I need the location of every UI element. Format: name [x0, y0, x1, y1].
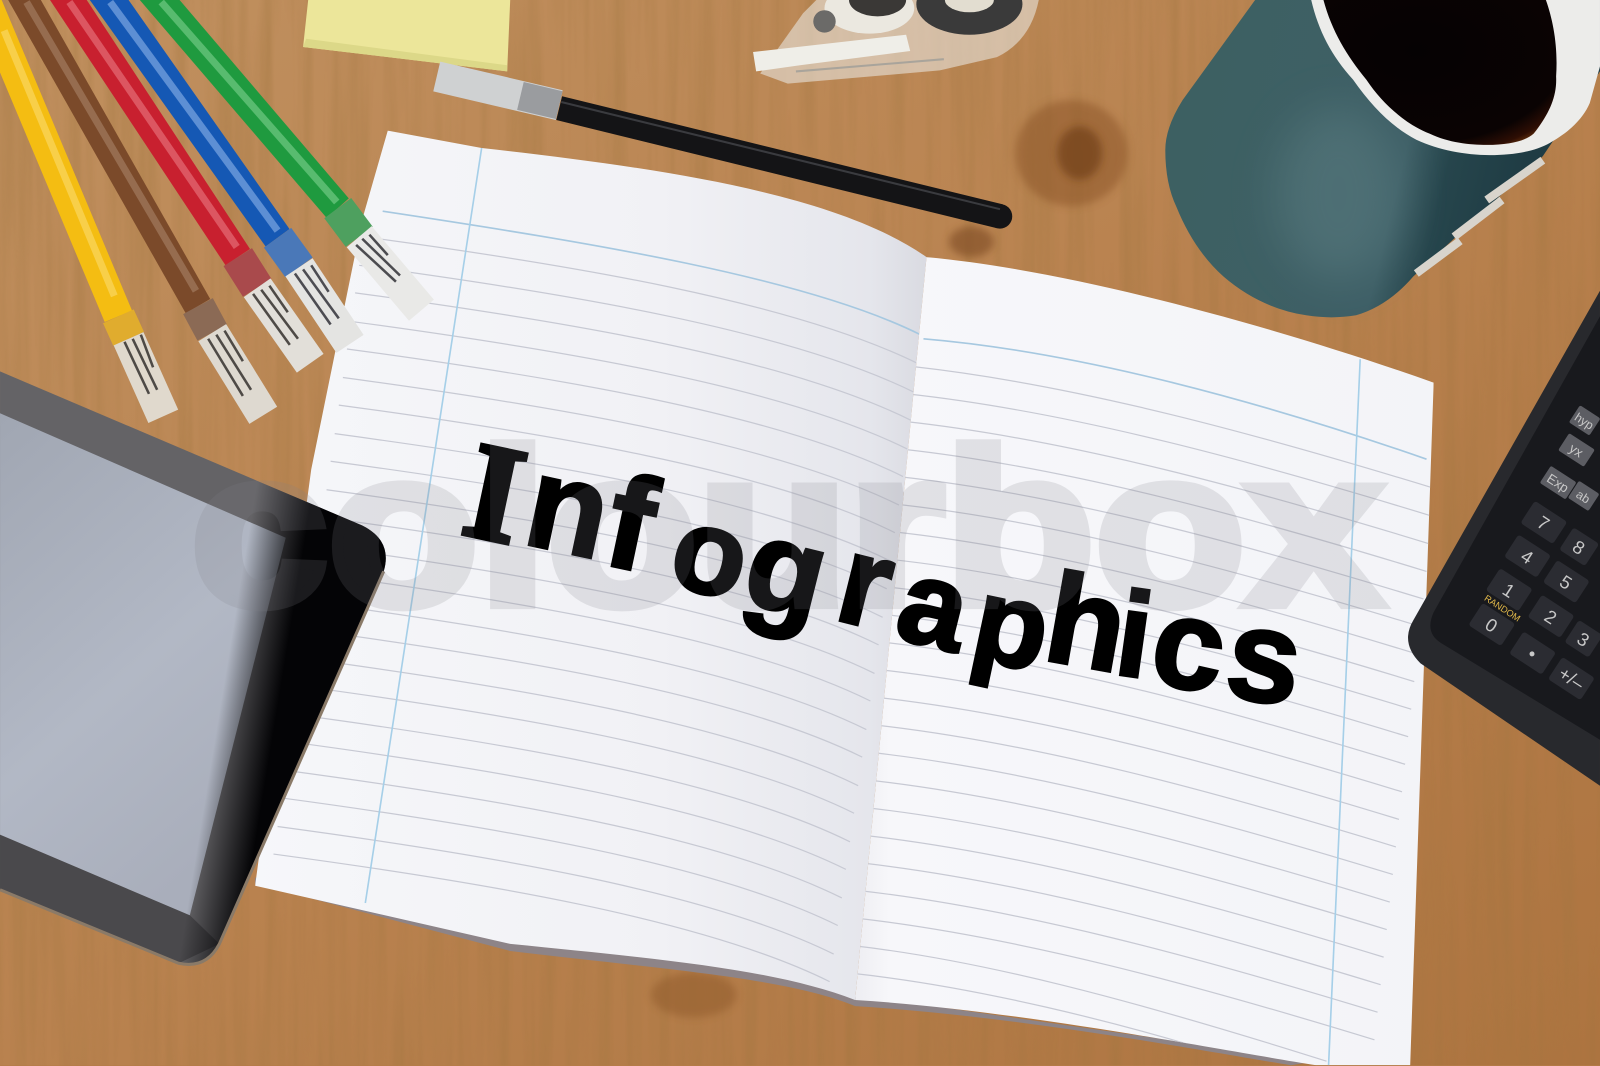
calculator keys: 7	[1534, 511, 1554, 535]
handwritten title: n	[515, 427, 623, 587]
green marker	[140, 0, 421, 310]
calculator keys: 2	[1541, 605, 1561, 628]
tablet bottom bezel	[0, 835, 219, 963]
tablet	[0, 367, 393, 969]
coloured markers	[0, 0, 421, 416]
sticky note	[303, 0, 510, 71]
red marker	[50, 0, 310, 363]
tablet screen	[0, 413, 286, 915]
handwritten title: g	[732, 491, 842, 648]
handwritten title: c	[1142, 569, 1237, 722]
calculator keys: 0	[1481, 613, 1501, 637]
mug lettering	[1416, 160, 1543, 273]
coffee mug	[1165, 0, 1600, 317]
calculator keys: RANDOM	[1483, 593, 1522, 624]
handwritten title: f	[594, 447, 669, 601]
mug highlight	[1276, 107, 1402, 281]
open notebook	[245, 122, 1449, 1065]
handwritten title: r	[825, 508, 907, 658]
handwritten title: a	[886, 531, 984, 678]
calculator keys: +/–	[1555, 662, 1589, 695]
right page	[843, 250, 1449, 1065]
calculator keys: 4	[1517, 545, 1537, 568]
calculator keys: Exp	[1544, 471, 1571, 496]
notebook page stack edge	[255, 878, 1316, 1065]
tablet metallic edge	[0, 571, 384, 964]
calculator keys: 3	[1573, 628, 1593, 651]
calculator keys: hyp	[1572, 410, 1596, 433]
calculator keys: 8	[1569, 536, 1589, 559]
coffee	[1323, 0, 1557, 145]
watermark: colourbox	[191, 404, 1383, 651]
calculator keys: 5	[1556, 571, 1576, 594]
calculator keys: •	[1524, 643, 1541, 664]
black pen	[437, 77, 1012, 229]
left page	[245, 122, 939, 1010]
handwritten title: I	[453, 412, 537, 573]
mug rim	[1311, 0, 1600, 155]
blue marker	[90, 0, 350, 344]
correction tape	[753, 0, 1039, 84]
calculator keys: yx	[1567, 441, 1586, 461]
yellow marker	[0, 0, 163, 416]
calculator keys	[1468, 405, 1600, 700]
black reflection fade on tablet	[183, 484, 386, 963]
calculator keys: 1	[1499, 579, 1519, 602]
calculator	[1408, 291, 1600, 786]
handwritten title: p	[962, 551, 1062, 698]
brown marker	[8, 0, 263, 415]
handwritten title: h	[1036, 547, 1137, 700]
handwritten title: s	[1219, 579, 1311, 734]
handwritten title: i	[1109, 566, 1161, 704]
calculator keys: ab	[1574, 487, 1593, 507]
handwritten title: o	[659, 478, 763, 627]
